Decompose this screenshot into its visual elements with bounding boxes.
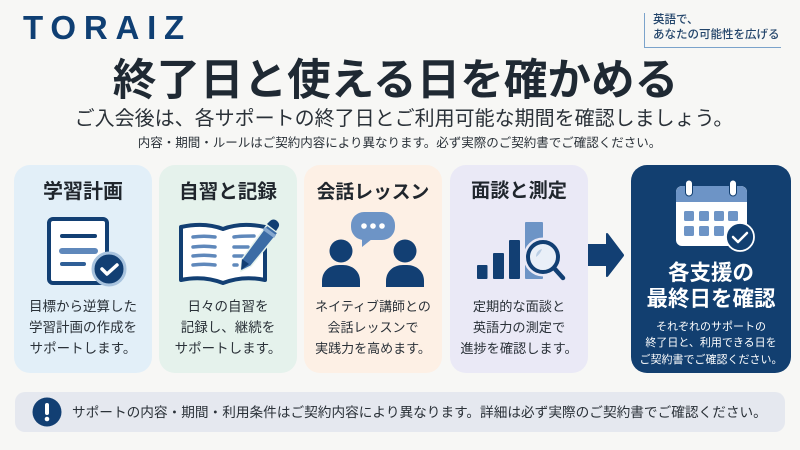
body text (175, 299, 281, 356)
callout text: サポートの内容・期間・利用条件はご契約内容により異なります。詳細は必ず実際のご契約書でご確認ください。 (72, 405, 767, 420)
body text: 学習計画の作成を (29, 320, 137, 335)
heading: 各支援の最終日を確認: 最終日を確認 (646, 286, 776, 310)
body text (29, 299, 137, 356)
logo: TORAIZ: TORAIZ (23, 9, 192, 46)
heading: 面談と測定: 面談と測定 (471, 181, 567, 202)
body text (315, 299, 431, 356)
tagline box: あなたの可能性を広げる (653, 28, 780, 40)
heading: 学習計画: 学習計画 (43, 181, 123, 203)
tagline box (644, 13, 781, 48)
tagline box: 英語で、 (653, 14, 699, 26)
body text: 終了日と、利用できる日を (645, 337, 777, 349)
panel: 自習と記録 (159, 165, 297, 373)
body text: サポートします。 (175, 341, 281, 356)
panel: 学習計画 (14, 165, 152, 373)
body text: サポートします。 (30, 341, 136, 356)
body text (640, 320, 782, 366)
arrow (588, 233, 624, 277)
title: 終了日と使える日を確かめる (113, 57, 678, 105)
icon: calendar with check (676, 180, 755, 252)
icon: bars and magnifier (477, 222, 566, 280)
body text: 定期的な面談と (473, 299, 565, 314)
panel: 各支援の最終日を確認 (631, 165, 791, 373)
callout bar (15, 392, 785, 432)
body text: ネイティブ講師との (315, 299, 431, 314)
body text (460, 299, 578, 356)
icon: open book and pencil (179, 220, 280, 285)
body text: 英語力の測定で (473, 320, 565, 335)
icon: document with check (47, 217, 126, 286)
subtitle: ご入会後は、各サポートの終了日とご利用可能な期間を確認しましょう。 (75, 108, 733, 130)
body text: 記録し、継続を (181, 320, 275, 335)
note line: 内容・期間・ルールはご契約内容により異なります。必ず実際のご契約書でご確認ください。 (138, 136, 661, 150)
body text: 会話レッスンで (327, 320, 418, 335)
panel: 面談と測定 (450, 165, 588, 373)
icon: exclamation (32, 398, 62, 426)
panel: 会話レッスン (304, 165, 442, 373)
body text: それぞれのサポートの (656, 320, 766, 332)
heading: 各支援の最終日を確認 (646, 261, 776, 310)
body text: 実践力を高めます。 (315, 341, 431, 356)
body text: ご契約書でご確認ください。 (640, 354, 782, 366)
body text: 日々の自習を (188, 299, 268, 314)
icon: two people talking (322, 212, 424, 287)
body text: 目標から逆算した (29, 299, 137, 314)
heading: 会話レッスン: 会話レッスン (317, 181, 429, 202)
heading: 自習と記録: 自習と記録 (179, 181, 277, 203)
heading: 各支援の最終日を確認: 各支援の (668, 261, 754, 285)
body text: 進捗を確認します。 (460, 341, 578, 356)
